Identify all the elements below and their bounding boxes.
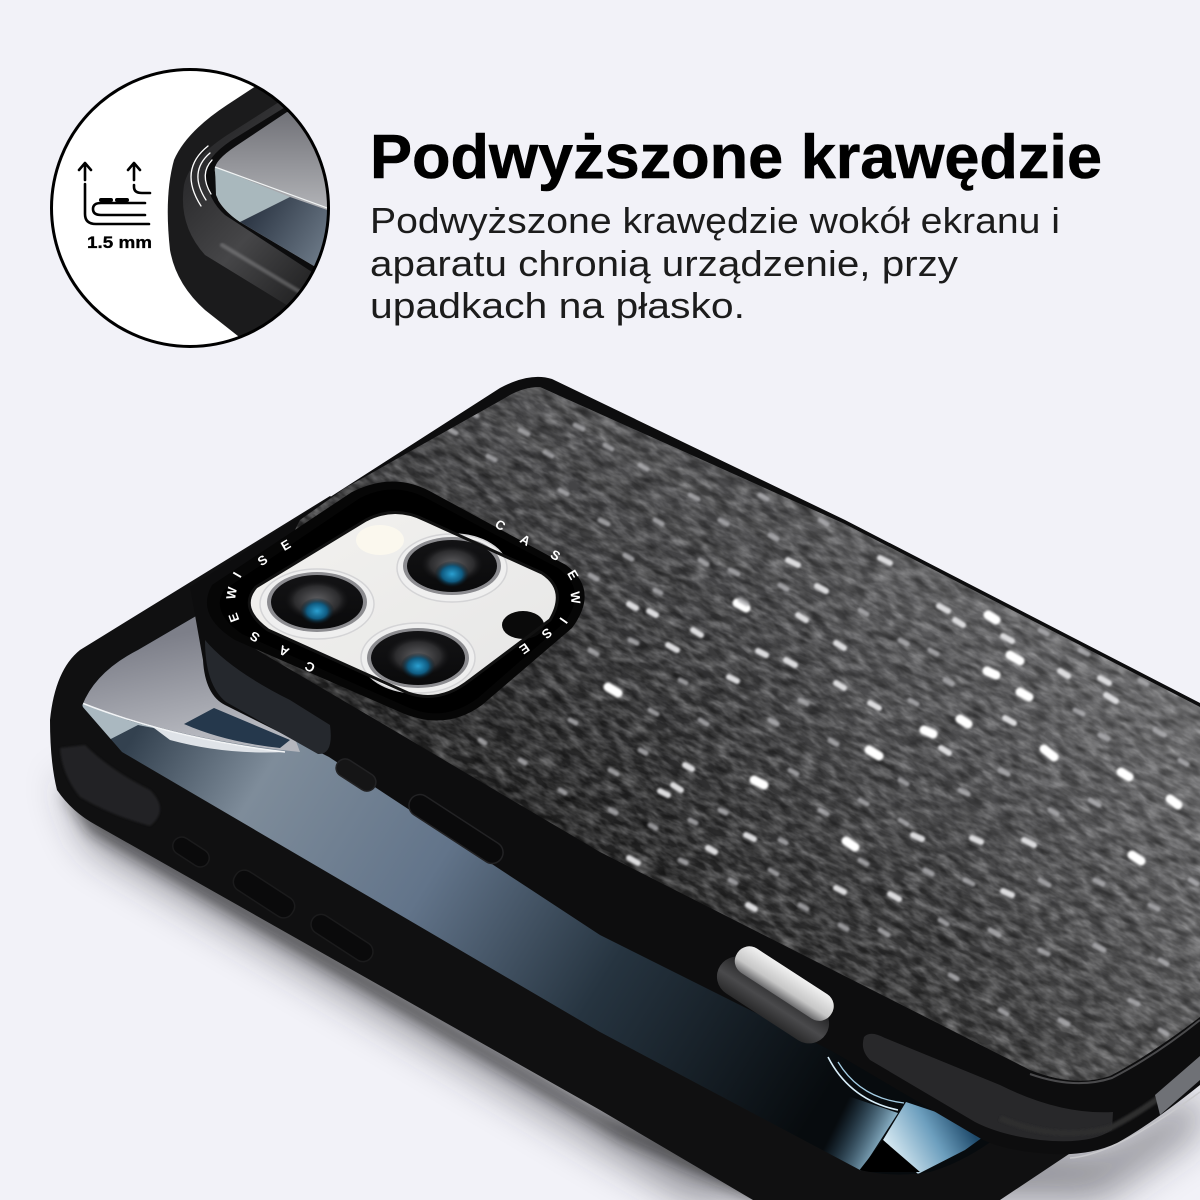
logo text around ring: right side [492, 516, 584, 658]
logo text around ring: right side: A [517, 531, 534, 549]
camera glass plate [249, 512, 557, 696]
logo text around ring: left side: S [255, 551, 271, 569]
logo text around ring: right side: S [538, 625, 555, 642]
description text: upadkach na płasko. [370, 285, 745, 326]
label: 1.5 mm: 1.5 mm [87, 233, 152, 252]
logo text around ring: right side: W [567, 591, 584, 605]
light wallpaper wedge [82, 704, 154, 739]
logo text around ring: right side: S [548, 547, 563, 564]
rear screen [82, 616, 989, 1174]
description text [370, 200, 1060, 326]
shadow under phones [60, 775, 1200, 1200]
logo text around ring: left side: I [230, 569, 245, 580]
flash [356, 525, 404, 555]
logo text around ring: left side: W [223, 585, 240, 601]
front phone body [190, 377, 1200, 1158]
white swoosh [150, 725, 285, 752]
front side buttons [333, 755, 507, 868]
front corner rim [1070, 1092, 1200, 1158]
rear phone body [50, 496, 1075, 1200]
icon: raised edge diagram [79, 163, 150, 224]
rear corner translucent bumper [60, 745, 160, 826]
glitter back panel [230, 380, 1200, 1100]
logo text around ring: left side [223, 536, 318, 676]
lens surrounds [260, 534, 507, 693]
logo text around ring: right side: E [564, 567, 582, 583]
front side translucent corner bumper [863, 1034, 1113, 1141]
inset phone corner [168, 87, 327, 336]
lens 1 [267, 572, 367, 632]
logo text around ring: left side: E [225, 611, 242, 624]
front side bumper grey patch [205, 640, 331, 754]
glitter sparkles [450, 412, 1197, 1034]
lens 2 [403, 537, 501, 595]
description text: Podwyższone krawędzie wokół ekranu i [370, 200, 1060, 241]
logo text around ring: right side: C [492, 516, 509, 534]
navy blob [184, 708, 290, 748]
speaker grille [1155, 1056, 1200, 1115]
description text: aparatu chronią urządzenie, przy [370, 243, 958, 284]
logo text around ring: left side: S [247, 628, 262, 646]
front edge gloss [1000, 1065, 1200, 1133]
lens 3 [367, 628, 469, 688]
logo text around ring: right side: I [557, 615, 571, 626]
lit bottom wallpaper flare [826, 1098, 898, 1170]
logo text around ring: right side: E [516, 640, 532, 658]
logo text around ring: left side: C [302, 658, 318, 676]
camera bump [207, 481, 585, 721]
camera ring inner edge [249, 512, 557, 696]
rear buttons [169, 834, 377, 965]
microphone hole [502, 611, 544, 639]
inset circle: raised edge close-up [52, 60, 330, 346]
title: Podwyższone krawędzie [370, 123, 1102, 192]
bottom edge highlight on glitter [1030, 1020, 1200, 1083]
logo text around ring: left side: E [278, 536, 294, 554]
logo text around ring: left side: A [276, 642, 292, 660]
grey upper wallpaper [83, 616, 300, 752]
charging port [709, 941, 839, 1051]
